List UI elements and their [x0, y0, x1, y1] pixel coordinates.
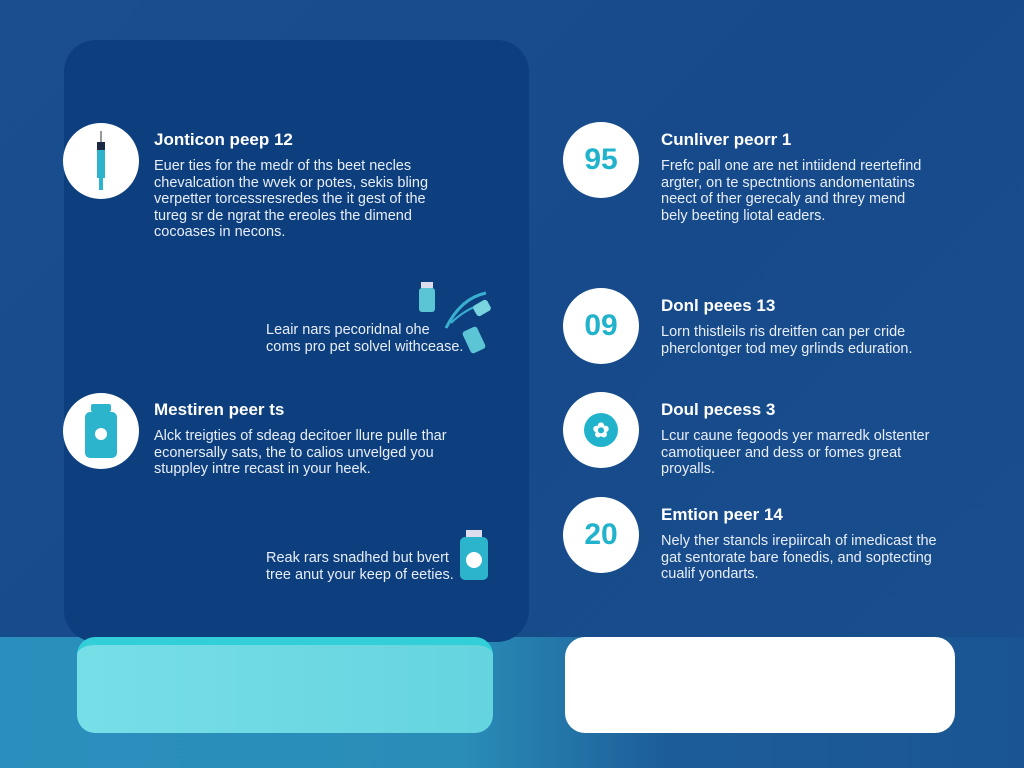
item: flower: Lcur caune fegoods yer marredk olstenter	[661, 428, 929, 444]
text	[154, 400, 447, 477]
white box	[565, 637, 955, 733]
item: 95: neect of ther gerecaly and threy mend	[661, 191, 905, 207]
text: Euer ties for the medr of ths beet necles	[154, 158, 411, 174]
item: 09: Donl peees 13	[661, 296, 775, 315]
icon: vials dna	[419, 282, 491, 354]
bottom band	[0, 637, 1024, 768]
callout: bottle: Reak rars snadhed but bvert	[266, 550, 449, 566]
left panel	[64, 40, 529, 642]
icon: medicine bottle	[63, 393, 139, 469]
callout: bottle	[266, 530, 488, 582]
item: 95	[563, 122, 921, 224]
item: 20: cualif yondarts.	[661, 566, 759, 582]
item: 20: gat sentorate bare fonedis, and soptecting	[661, 550, 932, 566]
callout: pills and dna: Leair nars pecoridnal ohe	[266, 322, 430, 338]
item: flower: camotiqueer and dess or fomes great	[661, 444, 901, 460]
item: 09: 09	[584, 309, 618, 342]
text: chevalcation the wvek or potes, sekis bling	[154, 174, 428, 190]
text: cocoases in necons.	[154, 224, 285, 240]
callout: pills and dna	[266, 282, 491, 354]
item: 95: bely beeting liotal eaders.	[661, 208, 825, 224]
icon: bottle	[460, 530, 488, 580]
item: flower: Doul pecess 3	[661, 400, 775, 419]
item: flower: ✿	[593, 420, 609, 442]
text: Jonticon peep 12	[154, 130, 293, 149]
item: 09	[563, 288, 912, 364]
item: 09: Lorn thistleils ris dreitfen can per cride	[661, 324, 905, 340]
item: flower	[563, 392, 930, 477]
item: 09: pherclontger tod mey grlinds eduration.	[661, 340, 912, 356]
item: 20: Nely ther stancls irepiircah of imedicast the	[661, 533, 937, 549]
item: 20: Emtion peer 14	[661, 505, 783, 524]
item: flower: proyalls.	[661, 461, 715, 477]
item: 95: 95	[584, 143, 618, 176]
item: 20	[563, 497, 937, 582]
cyan box	[77, 637, 493, 733]
item: 20: 20	[584, 518, 618, 551]
item: 95: Frefc pall one are net intiidend reertefind	[661, 158, 921, 174]
icon: syringe	[63, 123, 139, 199]
text: stuppley intre recast in your heek.	[154, 461, 371, 477]
text: Mestiren peer ts	[154, 400, 284, 419]
text: verpetter torcessresredes the it gest of the	[154, 191, 426, 207]
item: 95: argter, on te spectntions andomentatins	[661, 174, 915, 190]
item: 95: Cunliver peorr 1	[661, 130, 791, 149]
callout: bottle: tree anut your keep of eeties.	[266, 566, 454, 582]
text	[154, 130, 428, 240]
text: tureg sr de ngrat the ereoles the dimend	[154, 208, 412, 224]
text: econersally sats, the to calios unvelged you	[154, 444, 434, 460]
callout: pills and dna: coms pro pet solvel withcease.	[266, 338, 463, 354]
item: syringe	[63, 123, 428, 240]
item: bottle	[63, 393, 447, 477]
text: Alck treigties of sdeag decitoer llure pulle thar	[154, 428, 447, 444]
